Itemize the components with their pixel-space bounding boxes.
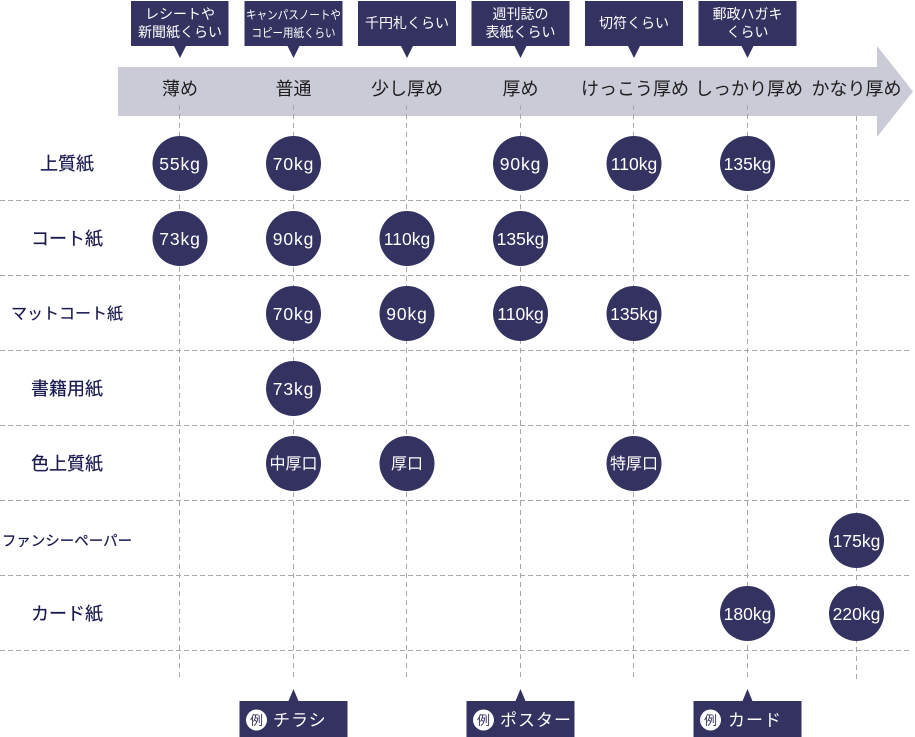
callout: postcard: 郵政ハガキ: [712, 6, 782, 22]
row: 上質紙 weights: 70kg: [273, 154, 314, 174]
example: flyer: [240, 689, 348, 737]
row: ファンシーペーパー weights: [829, 513, 884, 568]
thickness scale labels: かなり厚め: [812, 79, 902, 99]
example: poster: ポスター: [500, 711, 572, 730]
row: 色上質紙 weights: 特厚口: [610, 455, 658, 473]
row: 上質紙 weights: 90kg: [500, 154, 541, 174]
row: 色上質紙 weights: 厚口: [391, 456, 423, 473]
row: コート紙 weights: 135kg: [497, 229, 544, 249]
row labels: paper types: 色上質紙: [31, 454, 103, 474]
callout: postcard: くらい: [726, 24, 768, 40]
row labels: paper types: コート紙: [31, 229, 103, 249]
thickness scale labels: しっかり厚め: [695, 79, 803, 99]
top callouts: size comparisons: [131, 1, 796, 58]
row: 色上質紙 weights: [266, 436, 662, 491]
thickness scale labels: 普通: [276, 79, 312, 99]
row: コート紙 weights: 73kg: [159, 229, 201, 249]
row: 上質紙 weights: [152, 136, 775, 191]
bottom example callouts: [240, 689, 802, 737]
callout: thousand yen bill: [358, 1, 456, 58]
callout: campus notebook or copy paper: コピー用紙くらい: [252, 26, 336, 40]
row labels: paper types: 上質紙: [40, 154, 94, 174]
callout: receipt or newspaper: 新聞紙くらい: [138, 24, 222, 40]
callout: stamp: 切符くらい: [599, 15, 669, 31]
callout: weekly magazine cover: 週刊誌の: [492, 6, 548, 22]
row labels: paper types: [2, 154, 132, 624]
row labels: paper types: カード紙: [31, 604, 103, 624]
callout: postcard: [698, 1, 796, 58]
callout: campus notebook or copy paper: キャンパスノートや: [246, 8, 341, 22]
row: 上質紙 weights: 55kg: [159, 154, 201, 174]
callout: receipt or newspaper: [131, 1, 228, 58]
callout: thousand yen bill: 千円札くらい: [365, 15, 449, 31]
thickness arrow: [118, 46, 913, 137]
example: flyer: 例: [250, 713, 263, 728]
row: カード紙 weights: [720, 586, 884, 641]
thickness scale labels: 厚め: [502, 79, 538, 99]
example: card: カード: [728, 711, 782, 730]
row: 書籍用紙 weights: [266, 361, 321, 416]
row: マットコート紙 weights: 90kg: [386, 304, 428, 324]
row: マットコート紙 weights: 135kg: [610, 304, 658, 324]
callout: campus notebook or copy paper: [244, 1, 342, 58]
thickness scale labels: [162, 79, 902, 99]
row: マットコート紙 weights: 70kg: [273, 304, 314, 324]
row labels: paper types: 書籍用紙: [31, 379, 103, 399]
row labels: paper types: ファンシーペーパー: [2, 533, 132, 550]
row: マットコート紙 weights: 110kg: [497, 304, 544, 324]
example: card: [694, 689, 802, 737]
callout: receipt or newspaper: レシートや: [145, 6, 215, 22]
row: カード紙 weights: 180kg: [724, 604, 771, 624]
row: コート紙 weights: [152, 211, 548, 266]
callout: weekly magazine cover: 表紙くらい: [486, 24, 556, 40]
row: コート紙 weights: 110kg: [384, 229, 430, 249]
callout: stamp: [585, 1, 683, 58]
thickness scale labels: 薄め: [162, 79, 198, 99]
row: 書籍用紙 weights: 73kg: [273, 379, 314, 399]
example: poster: 例: [477, 713, 490, 728]
callout: weekly magazine cover: [472, 1, 570, 58]
row labels: paper types: マットコート紙: [11, 305, 123, 323]
row: ファンシーペーパー weights: 175kg: [833, 531, 880, 551]
row: 色上質紙 weights: 中厚口: [269, 455, 318, 473]
thickness scale labels: けっこう厚め: [581, 79, 689, 99]
row: コート紙 weights: 90kg: [273, 229, 314, 249]
row: 上質紙 weights: 135kg: [724, 154, 771, 174]
thickness scale labels: 少し厚め: [371, 79, 443, 99]
row: マットコート紙 weights: [266, 286, 662, 341]
example: card: 例: [704, 713, 717, 728]
example: flyer: チラシ: [273, 711, 327, 730]
row: カード紙 weights: 220kg: [833, 604, 880, 624]
example: poster: [466, 689, 574, 737]
row: 上質紙 weights: 110kg: [611, 154, 657, 174]
